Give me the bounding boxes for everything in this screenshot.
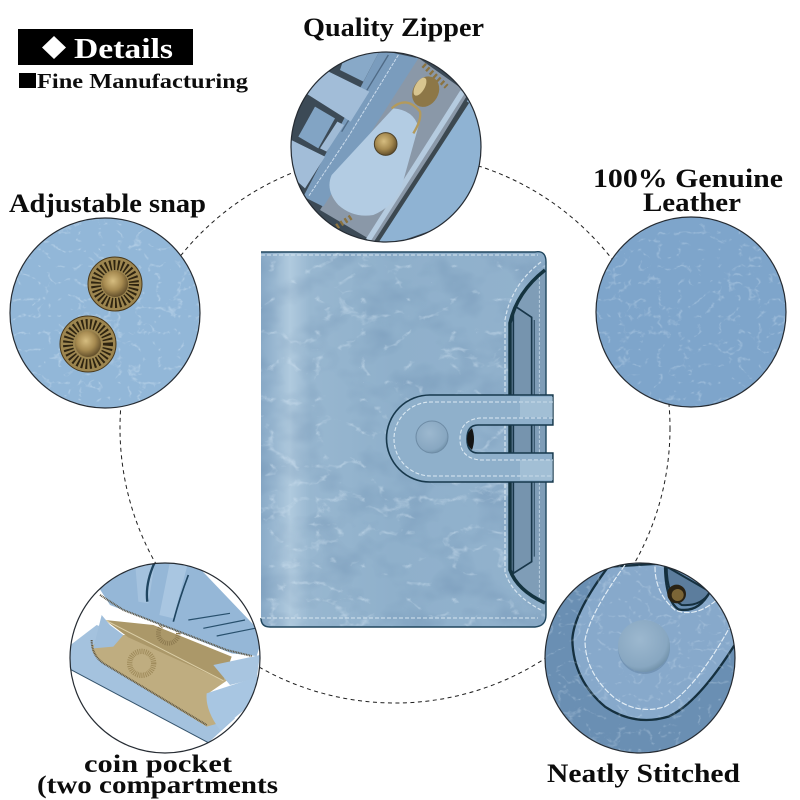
label: 100% Genuine Leather: 100% Genuine: [593, 164, 783, 193]
snap stud top: [88, 257, 142, 311]
stitching: [585, 565, 730, 709]
badge: Details: Details: [74, 33, 173, 65]
label: Neatly Stitched: Neatly Stitched: [547, 759, 741, 788]
label: coin pocket: coin pocket: [84, 751, 233, 778]
subtitle: Fine Manufacturing: Fine Manufacturing: [37, 69, 249, 93]
label: 100% Genuine Leather: Leather: [643, 188, 741, 217]
card slots: [340, 52, 378, 82]
zoom circle: coin pocket: [68, 562, 263, 755]
snap stud bottom: [60, 316, 116, 372]
leather panel: [375, 100, 480, 242]
upper flap: [99, 562, 263, 656]
card slot lines: [188, 613, 255, 636]
badge: Details: [18, 29, 193, 65]
label: coin pocket: [37, 751, 278, 799]
flap straps: [136, 564, 154, 603]
wallet slot shadow: [467, 428, 474, 450]
zipper edge: [368, 92, 463, 240]
wallet flap edge and stitching: [261, 255, 545, 618]
upper compartment: [105, 620, 232, 681]
side gussets: [93, 615, 123, 648]
strap: [303, 50, 418, 207]
wallet body: [261, 250, 551, 628]
label: 100% Genuine Leather: [593, 164, 783, 217]
pull tab: [329, 108, 418, 216]
stud hole: [667, 567, 710, 605]
interior lining: [92, 635, 230, 727]
central wallet: [261, 250, 556, 628]
wallet inner pocket: [483, 260, 546, 626]
zipper teeth: [337, 65, 447, 227]
label: Adjustable snap: Adjustable snap: [9, 189, 206, 218]
wallet snap button: [416, 421, 448, 453]
zoom circle: zipper: [288, 50, 490, 248]
dashed connector ring: [120, 153, 670, 703]
label: coin pocket: (two compartments: [37, 772, 278, 799]
zoom circle: neatly stitched: [545, 563, 743, 755]
wallet strap: [386, 393, 556, 485]
strap: [572, 563, 743, 720]
snap button: [618, 620, 670, 674]
zip track: [92, 640, 207, 725]
zoom circle: adjustable snap: [10, 218, 200, 408]
emblem: [130, 651, 154, 675]
rivet: [374, 133, 397, 155]
label: Quality Zipper: Quality Zipper: [303, 13, 484, 42]
base panel: [68, 625, 235, 743]
icon: diamond: [42, 36, 66, 59]
zipper tape: [320, 57, 468, 243]
flap zipper: [100, 595, 252, 656]
zoom circle: genuine leather: [596, 217, 788, 409]
